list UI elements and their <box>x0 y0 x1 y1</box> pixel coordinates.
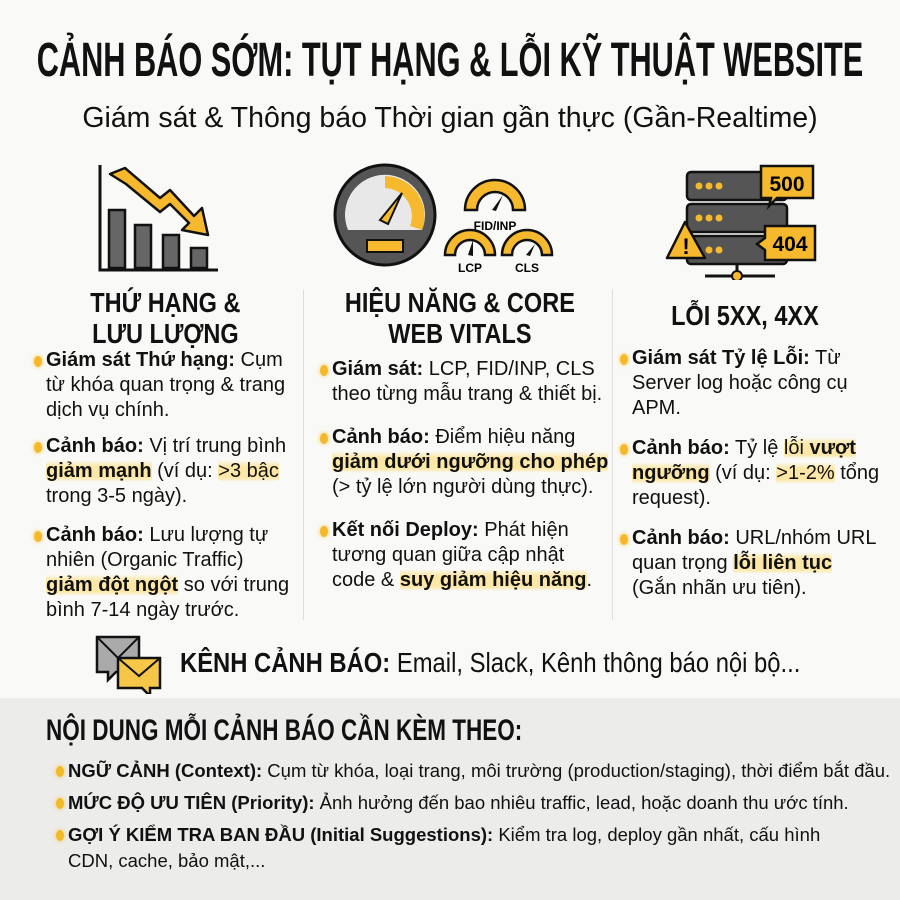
panel: errors <box>616 346 879 599</box>
heading: col 2 <box>345 287 575 349</box>
list: alert contents: NGỮ CẢNH (Context): Cụm từ khóa, loại trang, môi trường (production/staging), thời điểm bắt đầu. <box>68 760 890 781</box>
heading: alert contents: NỘI DUNG MỖI CẢNH BÁO CẦN KÈM THEO: <box>46 714 522 747</box>
list: alert contents: MỨC ĐỘ ƯU TIÊN (Priority): Ảnh hưởng đến bao nhiêu traffic, lead, hoặc doanh thu ước tính. <box>68 792 849 813</box>
panel: ranking & traffic <box>30 349 289 621</box>
panel: errors: Cảnh báo: URL/nhóm URL <box>632 527 876 549</box>
panel: errors: ngưỡng (ví dụ: >1-2% tổng <box>632 462 879 484</box>
panel: ranking & traffic: Cảnh báo: Vị trí trung bình <box>46 435 286 457</box>
icon: server errors: 500 <box>769 173 805 196</box>
icon: server errors: 404 <box>772 233 808 256</box>
panel: ranking & traffic: giảm đột ngột so với trung <box>46 574 289 596</box>
list: alert contents: GỢI Ý KIỂM TRA BAN ĐẦU (Initial Suggestions): Kiểm tra log, deploy gần nhất, cấu hình <box>68 824 820 845</box>
heading: col 2: WEB VITALS <box>388 318 532 349</box>
panel: ranking & traffic: bình 7-14 ngày trước. <box>46 599 239 621</box>
alert channels: KÊNH CẢNH BÁO: Email, Slack, Kênh thông báo nội bộ... <box>180 647 800 678</box>
panel: ranking & traffic: Cảnh báo: Lưu lượng tự <box>46 524 268 546</box>
panel: performance: Giám sát: LCP, FID/INP, CLS <box>332 358 595 380</box>
heading: col 3: LỖI 5XX, 4XX <box>671 300 819 331</box>
panel: errors: Giám sát Tỷ lệ Lỗi: Từ <box>632 347 841 369</box>
heading: col 1: LƯU LƯỢNG <box>92 318 238 349</box>
icon: envelopes <box>96 636 162 694</box>
panel: ranking & traffic: giảm mạnh (ví dụ: >3 bậc <box>46 460 279 482</box>
heading: col 1: THỨ HẠNG & <box>90 287 240 318</box>
panel: errors: Server log hoặc công cụ <box>632 372 848 394</box>
panel: ranking & traffic: trong 3-5 ngày). <box>46 485 187 507</box>
panel: ranking & traffic: Giám sát Thứ hạng: Cụm <box>46 349 283 371</box>
panel: performance: tương quan giữa cập nhật <box>332 544 564 566</box>
heading: col 1 <box>90 287 240 349</box>
panel: performance: code & suy giảm hiệu năng. <box>332 569 592 591</box>
panel: performance: Cảnh báo: Điểm hiệu năng <box>332 426 575 448</box>
panel: ranking & traffic: từ khóa quan trọng & trang <box>46 374 285 396</box>
panel: ranking & traffic: nhiên (Organic Traffic) <box>46 549 244 571</box>
panel: errors: request). <box>632 487 711 509</box>
title: CẢNH BÁO SỚM: TỤT HẠNG & LỖI KỸ THUẬT WEBSITE <box>37 34 863 87</box>
icon: server errors <box>666 164 816 280</box>
icon: speedometers: CLS <box>515 261 539 275</box>
subtitle: Giám sát & Thông báo Thời gian gần thực (Gần-Realtime) <box>82 102 818 134</box>
icon: speedometers: LCP <box>458 261 482 275</box>
panel: performance: Kết nối Deploy: Phát hiện <box>332 519 569 541</box>
panel: performance <box>316 358 608 591</box>
panel: errors: (Gắn nhãn ưu tiên). <box>632 577 807 599</box>
panel: errors: APM. <box>632 397 681 419</box>
icon: speedometers: FID/INP <box>474 219 516 233</box>
icon: speedometers <box>334 164 554 275</box>
panel: errors: Cảnh báo: Tỷ lệ lỗi vượt <box>632 437 856 459</box>
panel: errors: quan trọng lỗi liên tục <box>632 552 832 574</box>
panel: performance: giảm dưới ngưỡng cho phép <box>332 451 608 473</box>
panel: performance: theo từng mẫu trang & thiết bị. <box>332 383 602 405</box>
heading: col 2: HIỆU NĂNG & CORE <box>345 287 575 318</box>
panel: performance: (> tỷ lệ lớn người dùng thực). <box>332 476 593 498</box>
list: alert contents <box>52 760 890 871</box>
icon: declining chart <box>98 165 218 272</box>
icon: server errors: ! <box>682 234 690 259</box>
panel: ranking & traffic: dịch vụ chính. <box>46 399 169 421</box>
panel: alert contents <box>0 698 900 900</box>
list: alert contents: CDN, cache, bảo mật,... <box>68 850 265 871</box>
